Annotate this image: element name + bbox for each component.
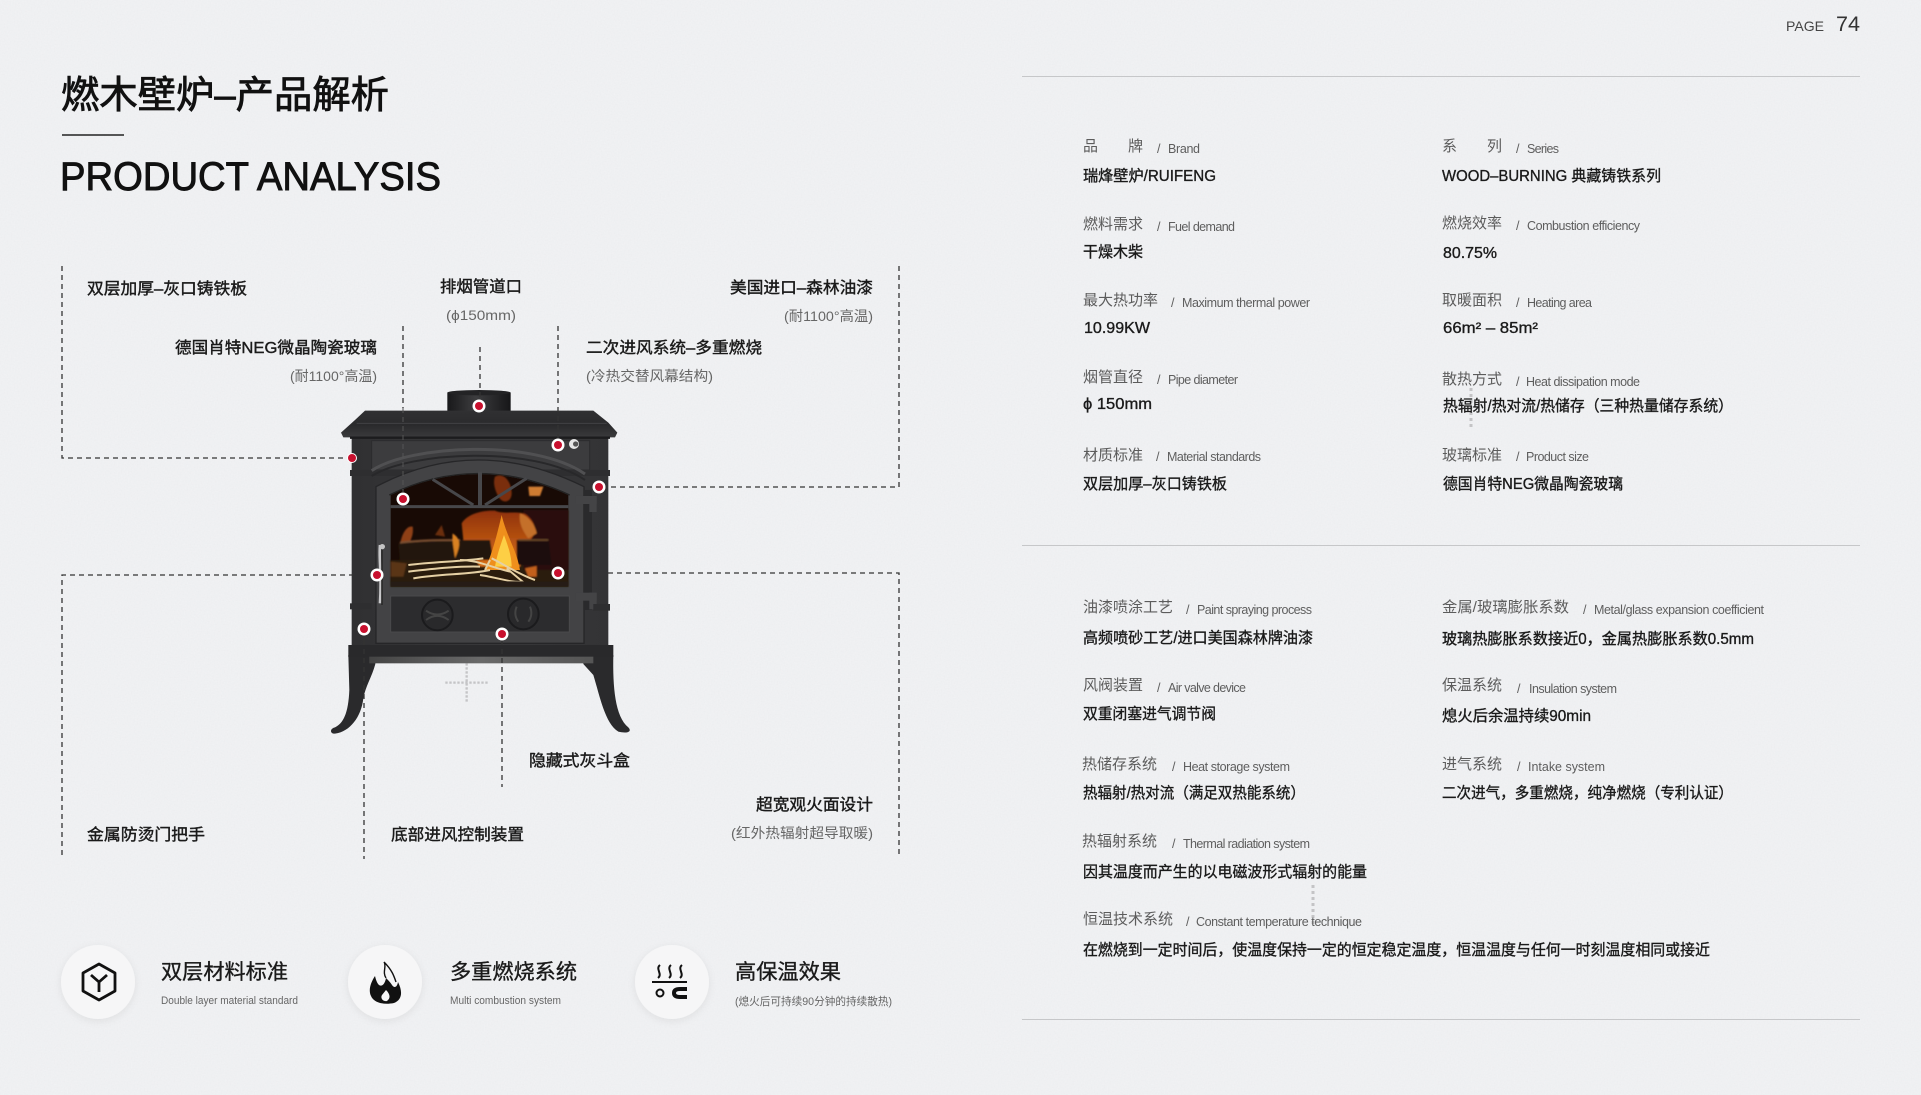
spec: heating area: / (1516, 296, 1520, 310)
annotation labels: 隐藏式灰斗盒 (529, 752, 630, 770)
title block: PRODUCT ANALYSIS (60, 155, 441, 199)
spec: brand: 瑞烽壁炉/RUIFENG (1083, 167, 1216, 185)
spec: series: WOOD–BURNING 典藏铸铁系列 (1442, 167, 1661, 185)
spec: glass standard: / (1516, 450, 1520, 464)
spec: combustion efficiency (1442, 214, 1641, 262)
spec: heat storage: 热辐射/热对流（满足双热能系统） (1083, 784, 1305, 802)
spec: glass standard: 玻璃标准 (1442, 447, 1502, 464)
icon: flame (370, 962, 401, 1004)
spec: heat storage: 热储存系统 (1082, 756, 1157, 773)
annotation labels (87, 278, 873, 844)
page number (1786, 13, 1860, 36)
stove door (376, 460, 584, 643)
spec: expansion coefficient: 金属/玻璃膨胀系数 (1442, 599, 1569, 616)
spec: material standards (1083, 447, 1261, 493)
spec: expansion coefficient: Metal/glass expansion coefficient (1594, 603, 1765, 617)
annotation labels: 排烟管道口 (440, 278, 522, 296)
spec: constant temperature: 在燃烧到一定时间后，使温度保持一定的恒定稳定温度，恒温温度与任何一时刻温度相同或接近 (1083, 941, 1710, 959)
spec: thermal radiation: 因其温度而产生的以电磁波形式辐射的能量 (1083, 863, 1367, 881)
spec: glass standard (1442, 447, 1623, 493)
spec: constant temperature: / (1186, 915, 1190, 929)
spec: intake (1442, 756, 1733, 802)
spec: fuel demand (1083, 215, 1235, 261)
annotation labels: 底部进风控制装置 (391, 826, 524, 844)
spec: insulation: Insulation system (1529, 682, 1617, 696)
red hotspot markers (347, 400, 606, 640)
annotation labels: 金属防烫门把手 (87, 826, 205, 844)
spec: constant temperature (1083, 911, 1710, 959)
spec: insulation: / (1517, 682, 1521, 696)
spec: heat storage: Heat storage system (1183, 760, 1290, 774)
annotation labels: 双层加厚–灰口铸铁板 (87, 280, 247, 298)
spec: pipe diameter: Pipe diameter (1168, 373, 1238, 387)
spec: air valve: 风阀装置 (1083, 677, 1143, 694)
stove window (391, 474, 568, 587)
spec: paint spraying: 高频喷砂工艺/进口美国森林牌油漆 (1083, 629, 1313, 647)
spec: material standards: / (1156, 450, 1160, 464)
spec: constant temperature: 恒温技术系统 (1083, 911, 1173, 928)
spec: paint spraying (1083, 599, 1313, 647)
spec: glass standard: 德国肖特NEG微晶陶瓷玻璃 (1443, 475, 1623, 493)
feature: multi combustion: 多重燃烧系统 (450, 961, 577, 984)
spec: insulation: 熄火后余温持续90min (1442, 706, 1591, 725)
spec: glass standard: Product size (1526, 450, 1589, 464)
spec: fuel demand: / (1157, 220, 1161, 234)
spec: paint spraying: / (1186, 603, 1190, 617)
spec: series: / (1516, 142, 1520, 156)
air knob (569, 439, 579, 449)
spec: paint spraying: 油漆喷涂工艺 (1083, 599, 1173, 616)
annotation labels: 超宽观火面设计 (756, 796, 873, 814)
spec: heat storage (1082, 756, 1305, 802)
base (348, 645, 613, 663)
spec: intake: Intake system (1528, 760, 1605, 774)
icon: heat waves and celsius (652, 965, 687, 997)
spec: heat dissipation mode: 散热方式 (1442, 371, 1502, 388)
spec: brand (1083, 138, 1216, 185)
spec: expansion coefficient: 玻璃热膨胀系数接近0，金属热膨胀系数0.5mm (1442, 630, 1754, 648)
feature: double layer material (61, 945, 298, 1019)
panel: basic specifications (1083, 138, 1733, 493)
annotation labels: (红外热辐射超导取暖) (731, 825, 873, 841)
spec: thermal radiation (1082, 833, 1367, 881)
stove frieze (372, 441, 590, 470)
faint dotted watermark crosses (445, 388, 1471, 927)
icon: cube (83, 964, 115, 1000)
spec: heating area: 取暖面积 (1442, 292, 1502, 309)
lower door panel with knobs (391, 596, 569, 632)
annotation labels: (ϕ150mm) (446, 307, 516, 323)
feature: heat retention: 高保温效果 (735, 961, 841, 984)
spec: constant temperature: Constant temperature technique (1196, 915, 1362, 929)
spec: maximum thermal power: Maximum thermal power (1182, 296, 1310, 310)
divider rules (1022, 76, 1860, 1020)
spec: fuel demand: 燃料需求 (1083, 215, 1143, 233)
stove legs (331, 655, 630, 734)
stove body (352, 436, 608, 648)
spec: heating area: 66m² – 85m² (1443, 320, 1538, 337)
panel: process and systems (1082, 599, 1765, 959)
spec: material standards: 双层加厚–灰口铸铁板 (1083, 475, 1227, 493)
illustration: cast-iron wood stove (331, 390, 630, 734)
feature: multi combustion (348, 945, 577, 1019)
spec: air valve (1083, 677, 1246, 723)
spec: thermal radiation: / (1172, 837, 1176, 851)
annotation labels: (耐1100°高温) (784, 308, 873, 324)
spec: brand: 品 牌 (1083, 138, 1143, 155)
spec: pipe diameter: 烟管直径 (1083, 369, 1143, 386)
feature: multi combustion: Multi combustion system (450, 995, 561, 1007)
title block (60, 75, 441, 199)
spec: expansion coefficient: / (1583, 603, 1587, 617)
spec: combustion efficiency: 80.75% (1443, 245, 1497, 262)
page number: PAGE (1786, 18, 1824, 34)
spec: paint spraying: Paint spraying process (1197, 603, 1312, 617)
spec: thermal radiation: Thermal radiation system (1183, 837, 1310, 851)
annotation labels: 二次进风系统–多重燃烧 (586, 339, 762, 357)
spec: maximum thermal power: 10.99KW (1084, 320, 1150, 337)
spec: air valve: Air valve device (1168, 681, 1246, 695)
feature: heat retention: (熄火后可持续90分钟的持续散热) (735, 994, 892, 1008)
spec: maximum thermal power: 最大热功率 (1083, 292, 1158, 309)
spec: insulation: 保温系统 (1442, 677, 1502, 694)
annotation labels: 美国进口–森林油漆 (730, 279, 873, 297)
spec: material standards: Material standards (1167, 450, 1261, 464)
spec: maximum thermal power: / (1171, 296, 1175, 310)
spec: fuel demand: 干燥木柴 (1083, 243, 1143, 261)
spec: air valve: 双重闭塞进气调节阀 (1083, 705, 1216, 723)
spec: heat dissipation mode: 热辐射/热对流/热储存（三种热量储存系统） (1443, 397, 1733, 415)
annotation labels: (耐1100°高温) (290, 368, 377, 384)
annotation labels: 德国肖特NEG微晶陶瓷玻璃 (175, 339, 377, 357)
leader lines (62, 266, 899, 859)
spec: series: Series (1527, 142, 1559, 156)
window grate bars (391, 472, 568, 507)
hinges (350, 490, 610, 611)
page number: 74 (1836, 13, 1860, 36)
spec: heat dissipation mode: Heat dissipation mode (1526, 375, 1640, 389)
stove flue collar (445, 390, 513, 415)
feature: double layer material: 双层材料标准 (161, 961, 288, 984)
door arch moulding (372, 449, 585, 474)
title block: 燃木壁炉–产品解析 (61, 75, 389, 117)
spec: series (1442, 138, 1661, 185)
annotation labels: (冷热交替风幕结构) (586, 368, 713, 384)
spec: heat dissipation mode: / (1516, 375, 1520, 389)
spec: combustion efficiency: Combustion efficiency (1527, 219, 1641, 233)
spec: fuel demand: Fuel demand (1168, 220, 1235, 234)
spec: heating area: Heating area (1527, 296, 1592, 310)
spec: air valve: / (1157, 681, 1161, 695)
spec: insulation (1442, 677, 1617, 725)
door handle (376, 545, 385, 603)
spec: heating area (1442, 292, 1592, 337)
fire (391, 475, 568, 587)
feature: double layer material: Double layer material standard (161, 995, 298, 1007)
spec: combustion efficiency: / (1516, 219, 1520, 233)
spec: intake: / (1517, 760, 1521, 774)
spec: pipe diameter (1083, 369, 1238, 413)
spec: heat dissipation mode (1442, 371, 1733, 415)
spec: brand: Brand (1168, 142, 1200, 156)
spec: intake: 进气系统 (1442, 756, 1502, 773)
spec: pipe diameter: / (1157, 373, 1161, 387)
spec: thermal radiation: 热辐射系统 (1082, 833, 1157, 850)
spec: brand: / (1157, 142, 1161, 156)
spec: intake: 二次进气，多重燃烧，纯净燃烧（专利认证） (1442, 784, 1733, 802)
spec: combustion efficiency: 燃烧效率 (1442, 214, 1502, 232)
spec: heat storage: / (1172, 760, 1176, 774)
spec: material standards: 材质标准 (1083, 447, 1143, 464)
spec: series: 系 列 (1442, 138, 1502, 155)
stove top plate (341, 411, 617, 437)
spec: expansion coefficient (1442, 599, 1765, 648)
feature: heat retention (635, 945, 892, 1019)
spec: maximum thermal power (1083, 292, 1310, 337)
spec: pipe diameter: ϕ 150mm (1083, 396, 1152, 413)
